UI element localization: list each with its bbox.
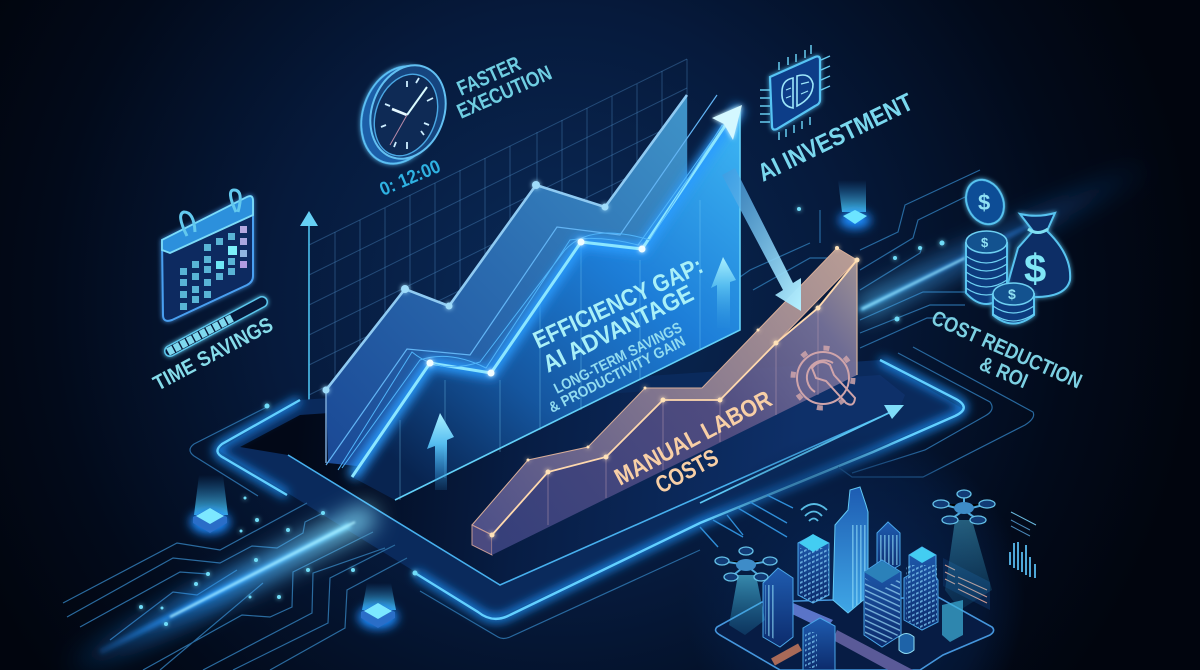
icon: money: $ <box>978 190 990 215</box>
efficiency gap text: AI ADVANTAGE <box>539 280 698 378</box>
circuit traces right <box>740 170 980 348</box>
cost reduction label: COST REDUCTION <box>928 307 1085 393</box>
icon: money: $ <box>1008 286 1016 302</box>
light streak left <box>67 514 372 670</box>
outer platform traces <box>190 347 1034 638</box>
AI investment label: AI INVESTMENT <box>753 88 918 187</box>
chart grid wall <box>309 59 687 440</box>
icon: money <box>959 174 1070 324</box>
icon: money: $ <box>1024 247 1046 291</box>
manual labor text: MANUAL LABOR <box>610 386 776 491</box>
up arrow right <box>711 257 736 328</box>
up arrow left <box>427 413 454 490</box>
icon: wifi signal <box>801 504 827 521</box>
manual labor text: COSTS <box>651 444 723 499</box>
faster execution label: EXECUTION <box>454 61 555 124</box>
city base <box>716 597 994 670</box>
platform arrow <box>700 405 904 503</box>
platform <box>217 360 965 620</box>
efficiency gap text <box>529 252 707 417</box>
icon: money: $ <box>981 235 989 250</box>
clock readout: 0: 12:00 <box>377 156 444 201</box>
time savings progress bar <box>168 302 262 352</box>
icon: drone right <box>933 490 995 610</box>
AI front chart layer <box>326 95 742 500</box>
light streak right <box>860 165 1150 310</box>
AI back chart layer <box>322 95 687 470</box>
cost reduction label: & ROI <box>976 352 1031 393</box>
time savings label: TIME SAVINGS <box>150 313 277 395</box>
city backdrop <box>680 430 1030 670</box>
city towers <box>763 487 938 670</box>
hologram panel <box>942 558 990 642</box>
efficiency gap text: & PRODUCTIVITY GAIN <box>546 333 688 417</box>
icon: gear and wrench <box>793 348 855 408</box>
manual labor chart <box>472 246 860 555</box>
data particles <box>139 207 944 626</box>
icon: calendar <box>162 190 253 321</box>
icon: clock <box>348 55 458 175</box>
city rooftop glow <box>799 534 936 583</box>
faster execution label: FASTER <box>454 52 524 101</box>
down arrow <box>722 168 801 311</box>
glowing node upper right <box>838 180 871 229</box>
efficiency gap text: LONG-TERM SAVINGS <box>551 319 685 398</box>
holographic mini chart <box>1010 512 1036 578</box>
circuit traces left <box>63 503 407 670</box>
glowing node left <box>190 475 230 534</box>
glowing node bottom <box>358 583 398 629</box>
efficiency gap text: EFFICIENCY GAP: <box>529 252 707 354</box>
manual labor back layer <box>472 248 857 535</box>
chart axis arrow <box>300 211 395 500</box>
icon: drone left <box>715 547 777 635</box>
icon: AI chip <box>760 45 830 140</box>
stripes above city <box>700 495 793 547</box>
